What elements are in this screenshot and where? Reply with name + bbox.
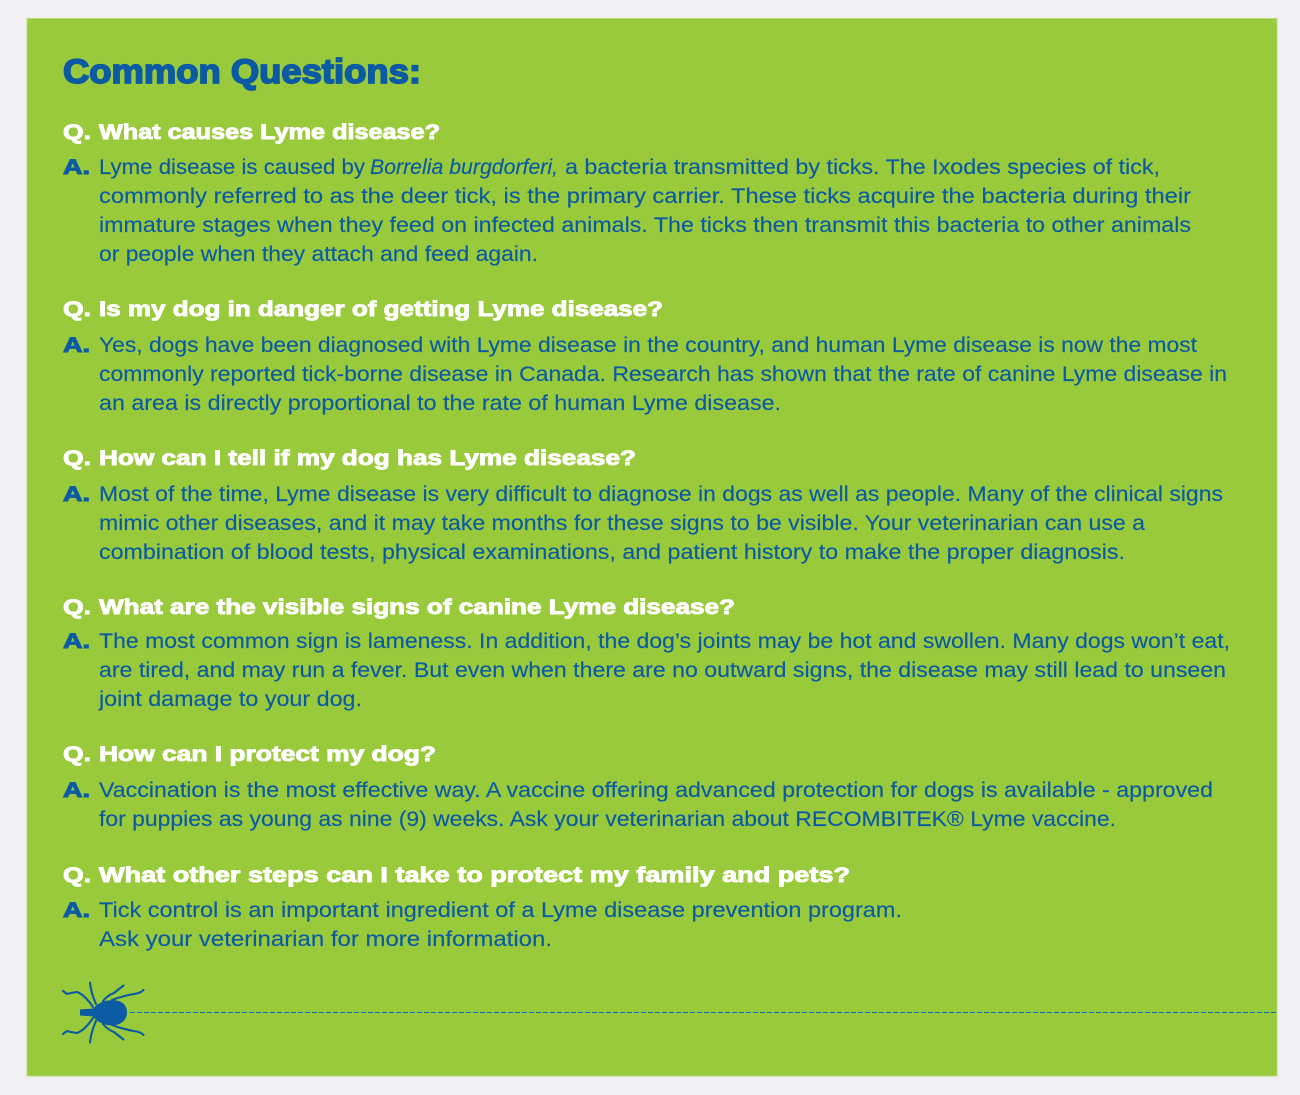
question 5: How can I protect my dog? — [99, 742, 436, 766]
answer 1: Lyme disease is caused by — [99, 155, 365, 179]
question 6: What other steps can I take to protect my family and pets? — [99, 863, 850, 887]
answer 3: Most of the time, Lyme disease is very difficult to diagnose in dogs as well as people. Many of the clinical signs — [99, 482, 1223, 506]
answer 1: Borrelia burgdorferi, — [370, 155, 558, 179]
answer 1: commonly referred to as the deer tick, is the primary carrier. These ticks acquire the bacteria during their — [99, 184, 1191, 208]
answer 3: mimic other diseases, and it may take months for these signs to be visible. Your veterinarian can use a — [99, 511, 1145, 535]
answer 4: are tired, and may run a fever. But even when there are no outward signs, the disease may still lead to unseen — [99, 658, 1226, 682]
answer 2: A. — [63, 333, 90, 357]
answer 5 — [63, 778, 1213, 831]
question and answer 2 — [63, 297, 1227, 415]
answer 3: A. — [63, 482, 90, 506]
answer 3 — [63, 482, 1223, 564]
question and answer 1 — [63, 120, 1191, 266]
answer 1: a bacteria transmitted by ticks. The Ixodes species of tick, — [565, 155, 1160, 179]
answer 5: A. — [63, 778, 90, 802]
answer 3: combination of blood tests, physical examinations, and patient history to make the proper diagnosis. — [99, 540, 1125, 564]
answer 1: immature stages when they feed on infected animals. The ticks then transmit this bacteria to other animals — [99, 213, 1191, 237]
question 6: Q. — [63, 863, 91, 887]
question 3: Q. — [63, 446, 91, 470]
dashed line — [130, 1012, 1277, 1014]
answer 4: The most common sign is lameness. In addition, the dog’s joints may be hot and swollen. Many dogs won’t eat, — [99, 629, 1230, 653]
answer 1 — [63, 155, 1191, 266]
answer 1: or people when they attach and feed again. — [99, 242, 538, 266]
question and answer 4 — [63, 595, 1230, 711]
answer 6: Ask your veterinarian for more information. — [99, 927, 552, 951]
question 4: What are the visible signs of canine Lyme disease? — [99, 595, 735, 619]
question 1: Q. — [63, 120, 91, 144]
answer 2: Yes, dogs have been diagnosed with Lyme disease in the country, and human Lyme disease is now the most — [99, 333, 1197, 357]
question 4: Q. — [63, 595, 91, 619]
answer 2: an area is directly proportional to the rate of human Lyme disease. — [99, 391, 781, 415]
question 1: What causes Lyme disease? — [99, 120, 440, 144]
question 2: Q. — [63, 297, 91, 321]
icon: tick — [63, 982, 144, 1042]
question 3: How can I tell if my dog has Lyme disease? — [99, 446, 636, 470]
answer 4: A. — [63, 629, 90, 653]
answer 2: commonly reported tick-borne disease in Canada. Research has shown that the rate of canine Lyme disease in — [99, 362, 1227, 386]
answer 5: Vaccination is the most effective way. A vaccine offering advanced protection for dogs is available - approved — [99, 778, 1213, 802]
question 2: Is my dog in danger of getting Lyme disease? — [99, 297, 663, 321]
answer 4 — [63, 629, 1230, 711]
question and answer 5 — [63, 742, 1213, 831]
answer 6: Tick control is an important ingredient of a Lyme disease prevention program. — [99, 898, 902, 922]
question and answer 3 — [63, 446, 1223, 564]
question and answer 6 — [63, 863, 902, 951]
question 5: Q. — [63, 742, 91, 766]
answer 5: for puppies as young as nine (9) weeks. Ask your veterinarian about RECOMBITEK® Lyme vaccine. — [99, 807, 1116, 831]
title: Common Questions: — [63, 53, 421, 91]
answer 6 — [63, 898, 902, 951]
answer 4: joint damage to your dog. — [98, 687, 362, 711]
answer 1: A. — [63, 155, 90, 179]
answer 2 — [63, 333, 1227, 415]
answer 6: A. — [63, 898, 90, 922]
